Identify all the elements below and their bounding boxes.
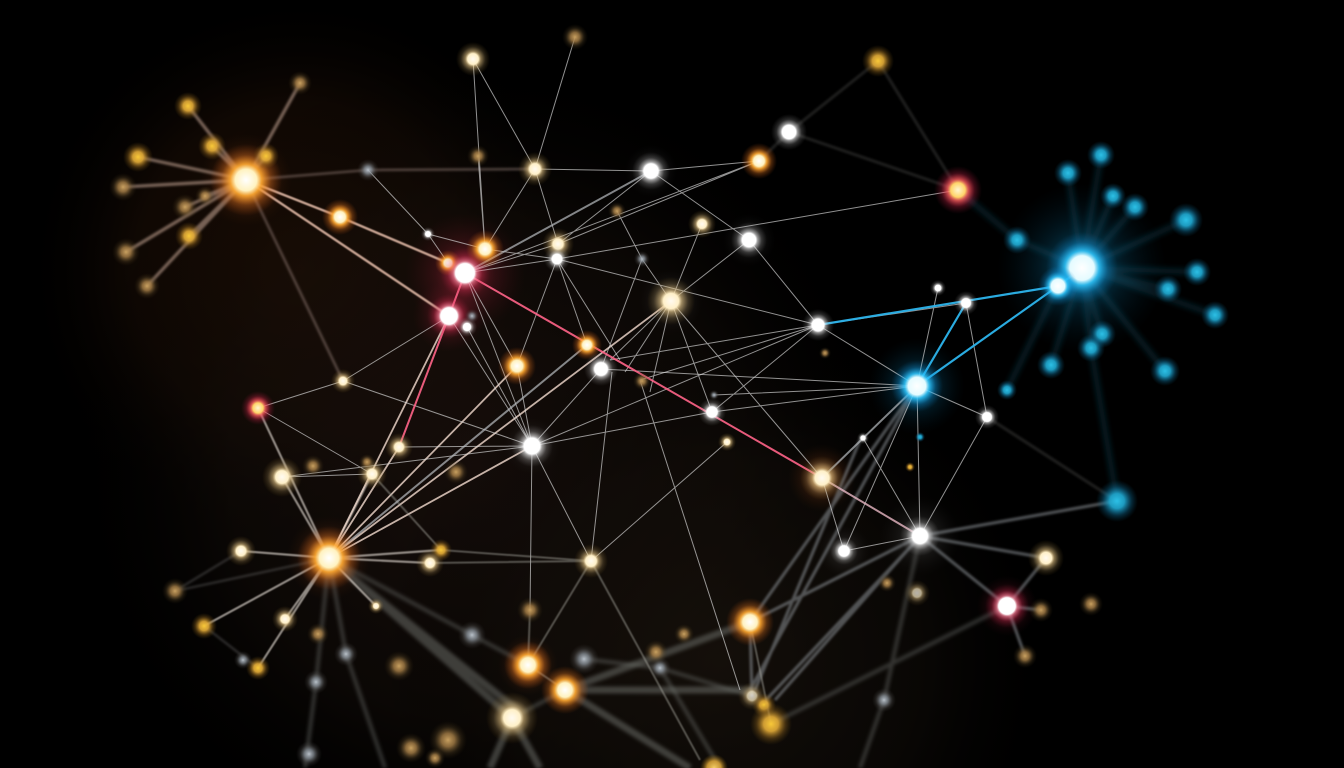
nodes: right centre bbox=[800, 280, 1103, 668]
medium grey edges at the centre bbox=[329, 171, 917, 558]
grey bundles at the bottom bbox=[305, 536, 1007, 768]
thin sharp central edges bbox=[258, 37, 987, 690]
cluster: lower-left hub and satellites bbox=[162, 526, 452, 767]
blurred upper right edges bbox=[759, 61, 1117, 501]
blurred outer blue hub edges bbox=[958, 155, 1215, 501]
orange hub edges bbox=[123, 83, 300, 286]
medium soft edges lower centre bbox=[372, 474, 771, 760]
cluster: orange hub and satellites bbox=[109, 71, 358, 299]
red edges bbox=[399, 273, 822, 478]
nodes: centre bbox=[241, 309, 834, 497]
grey fan from the lower right hub bbox=[750, 386, 1117, 700]
faint outer edges near lower-left hub bbox=[175, 551, 329, 668]
bright edges around lower-left hub bbox=[204, 408, 441, 668]
soft colour glows around hubs bbox=[200, 134, 1167, 695]
nodes: upper centre bbox=[357, 24, 982, 338]
cluster: blue hub and satellites bbox=[997, 141, 1229, 522]
pink fading edge into the lower right hub bbox=[822, 478, 920, 536]
warm strong edges from orange hub bbox=[246, 180, 449, 316]
faint long edges from the orange hub bbox=[246, 169, 535, 381]
blue edges bbox=[818, 268, 1082, 386]
nodes: bottom centre bbox=[384, 544, 896, 768]
warm sharp edges from lower-left hub bbox=[329, 301, 671, 558]
